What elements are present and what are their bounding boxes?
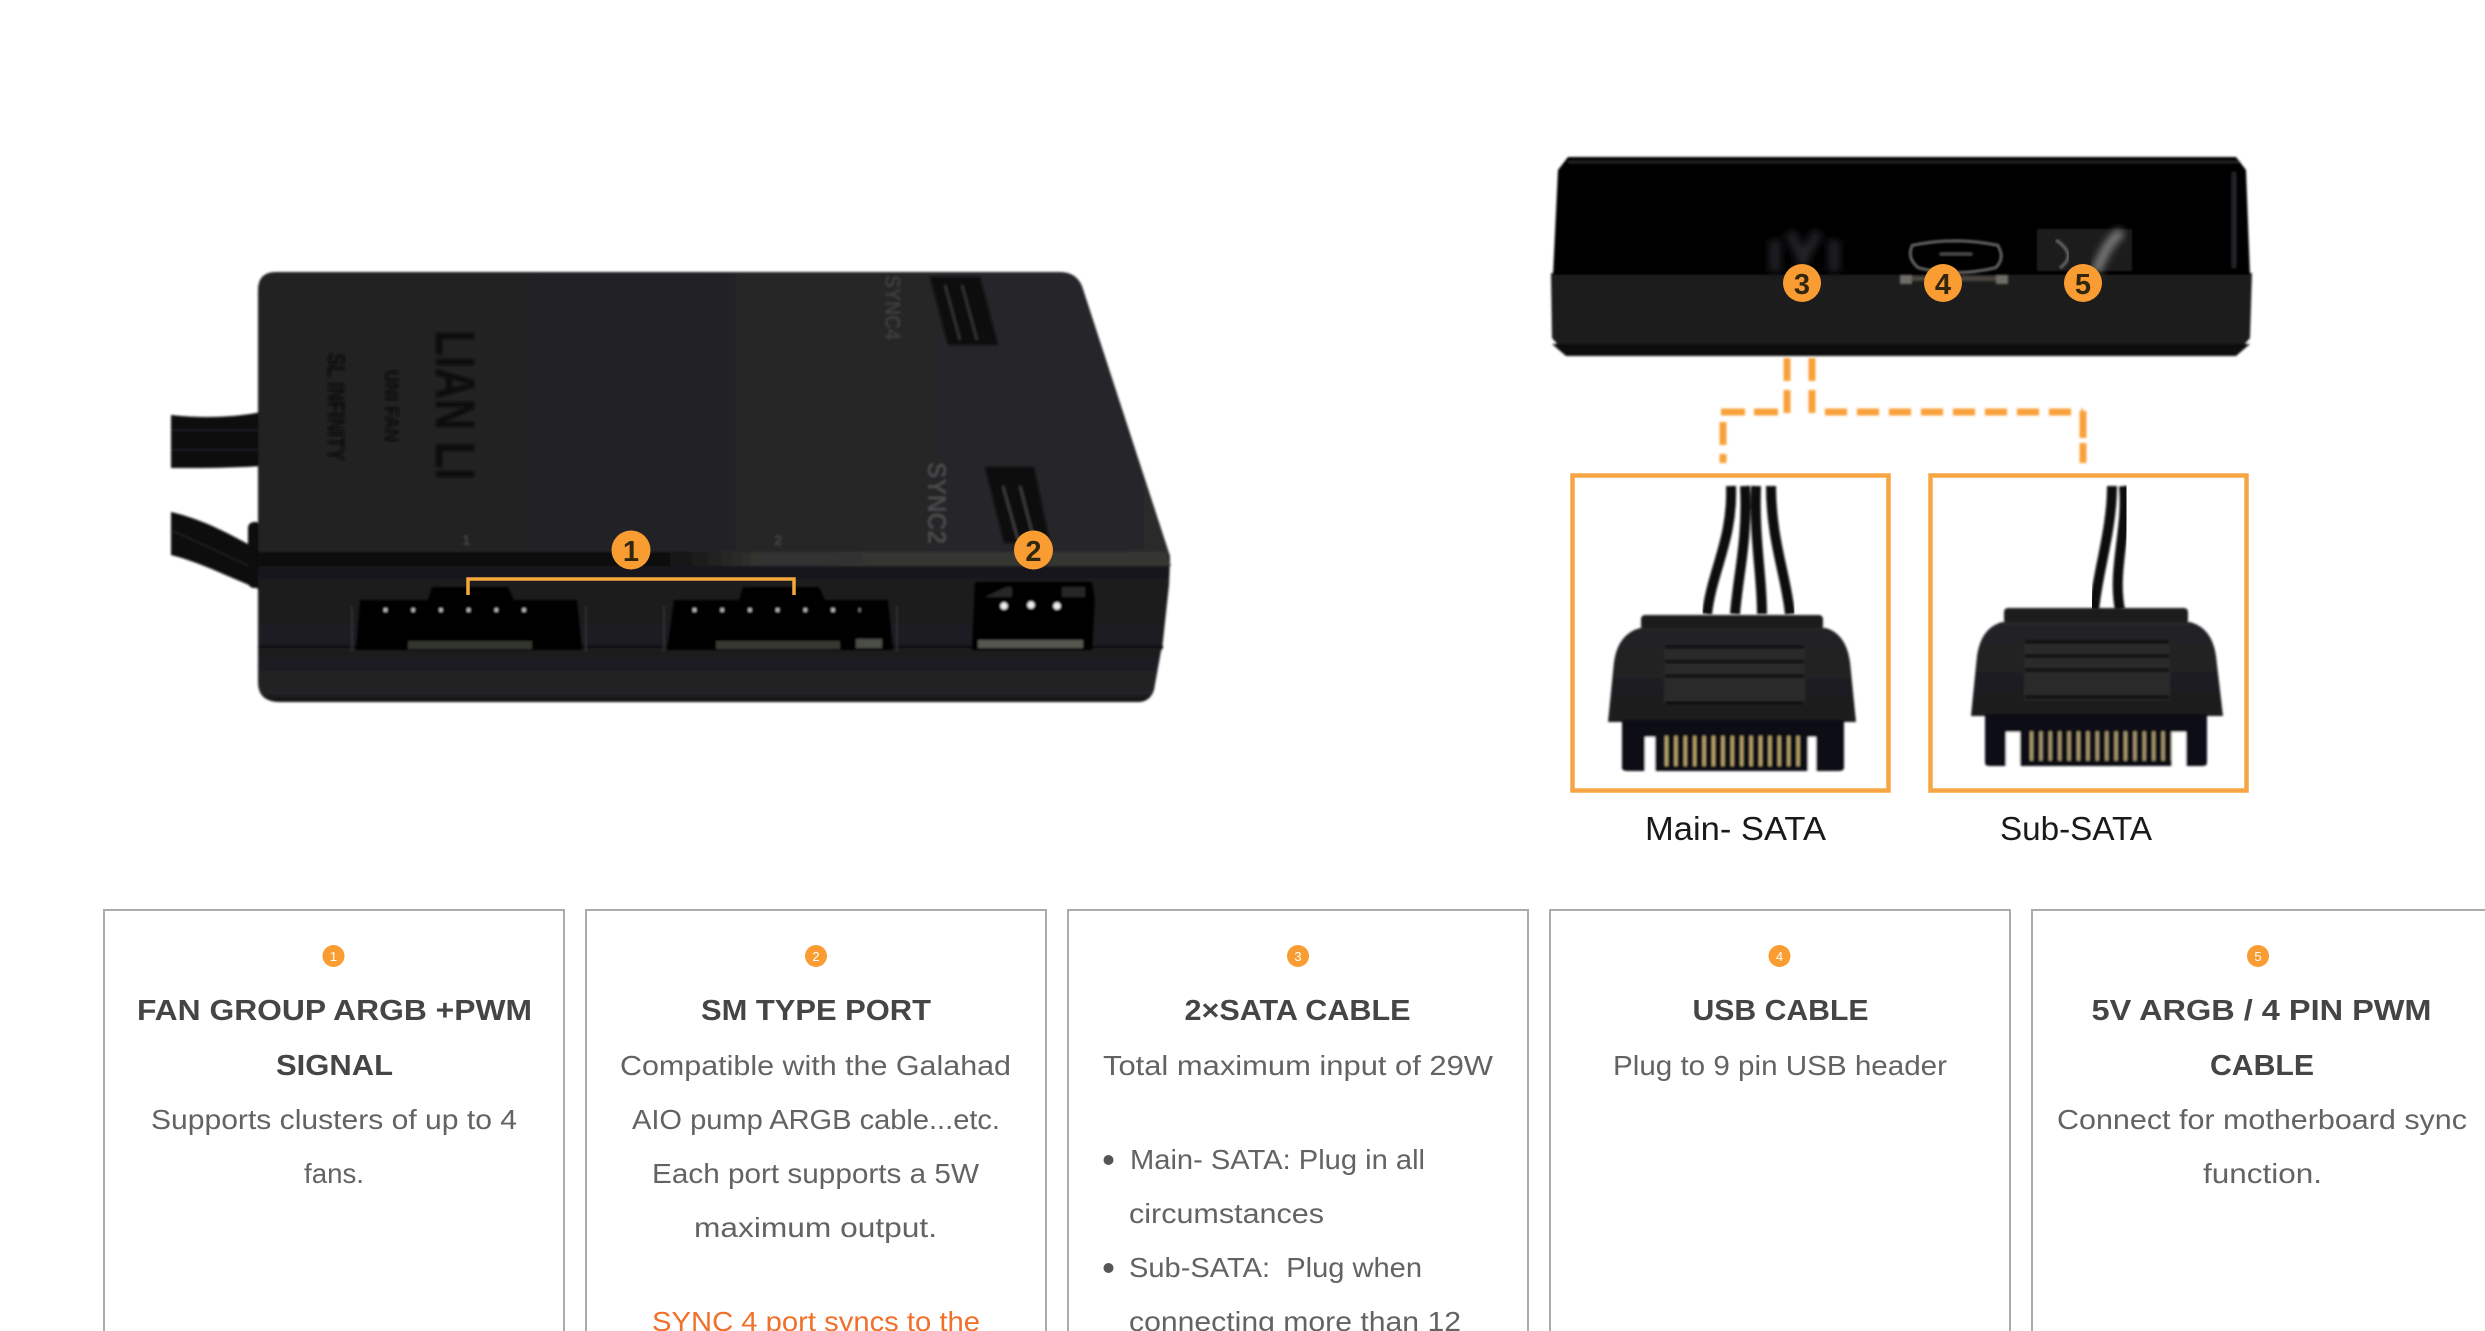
product photo: hub rear view: [1551, 157, 2252, 847]
heading: FAN GROUP ARGB +PWM: [137, 995, 532, 1027]
number marker 1: 1: [330, 949, 337, 964]
sub SATA cables: [2094, 486, 2125, 610]
panel: SATA cable: [1068, 910, 1528, 1331]
description: [151, 1104, 517, 1189]
embossed hub markings: SL INFINITY: [322, 353, 349, 461]
description: fans.: [304, 1158, 364, 1189]
heading: CABLE: [2210, 1050, 2314, 1082]
number marker 2: 2: [812, 949, 820, 964]
heading: SM TYPE PORT: [701, 995, 932, 1027]
panel: SM type port: [586, 910, 1046, 1331]
SATA cable exit: [1775, 232, 1834, 272]
SM port: [972, 582, 1095, 650]
bracket joining fan ports: [468, 579, 794, 595]
main SATA cables: [1707, 486, 1790, 614]
bullet list: [1104, 1144, 1461, 1331]
bullet list: Main- SATA: Plug in all: [1130, 1144, 1425, 1175]
dashed connector lines: [1721, 358, 2083, 463]
embossed hub markings: 2: [774, 532, 782, 549]
badge 4: [1924, 264, 1962, 302]
heading: USB CABLE: [1692, 995, 1868, 1027]
main SATA plug: [1608, 615, 1856, 771]
fan port 1: [352, 587, 586, 652]
description: function.: [2203, 1158, 2322, 1189]
description: AIO pump ARGB cable...etc.: [632, 1104, 1000, 1135]
heading: 5V ARGB / 4 PIN PWM: [2092, 995, 2432, 1027]
label: Main SATA: Main- SATA: [1645, 810, 1826, 847]
embossed hub markings: SYNC2: [922, 462, 952, 544]
badge 5: 5: [2075, 269, 2091, 301]
badge 3: 3: [1794, 269, 1810, 301]
badge 4: 4: [1935, 269, 1951, 301]
SYNC slots on top face: [930, 277, 1050, 543]
fan port 2: [664, 587, 897, 652]
embossed hub markings: [322, 275, 952, 549]
badge 3: [1783, 264, 1821, 302]
micro USB port: [1900, 240, 2008, 284]
description: [620, 1050, 1011, 1243]
badge 2: [1014, 530, 1053, 570]
number marker 3: [1287, 945, 1309, 967]
rear housing: [1551, 157, 2252, 356]
bullet list: Sub-SATA: Plug when: [1129, 1252, 1422, 1283]
ARGB PWM cable port: [2037, 229, 2132, 272]
description: Each port supports a 5W: [652, 1158, 980, 1189]
description: [2057, 1104, 2467, 1189]
product photo: hub top and front view: [171, 272, 1171, 702]
panel: sub SATA connector: [1930, 476, 2246, 790]
embossed hub markings: LIAN LI: [424, 330, 487, 480]
embossed hub markings: SYNC4: [880, 275, 905, 341]
badge 5: [2064, 264, 2102, 302]
heading: 2×SATA CABLE: [1184, 995, 1410, 1027]
label: Sub SATA: Sub-SATA: [2000, 810, 2152, 847]
badge 1: 1: [623, 536, 639, 568]
panel: main SATA connector: [1572, 476, 1888, 790]
embossed hub markings: 1: [462, 532, 470, 549]
number marker 3: 3: [1294, 949, 1302, 964]
bullet list: circumstances: [1129, 1198, 1324, 1229]
panel: USB cable: [1550, 910, 2010, 1331]
number marker 2: [805, 945, 827, 967]
embossed hub markings: UNI FAN: [380, 370, 401, 442]
number marker 4: [1768, 945, 1790, 967]
number marker 1: [322, 945, 344, 967]
badge 1: [612, 530, 650, 570]
description: maximum output.: [694, 1212, 937, 1243]
number marker 5: 5: [2254, 949, 2262, 964]
heading: [137, 995, 532, 1082]
badge 2: 2: [1025, 536, 1042, 568]
description: Plug to 9 pin USB header: [1613, 1050, 1947, 1081]
heading: SIGNAL: [276, 1050, 393, 1082]
description: Total maximum input of 29W: [1103, 1050, 1494, 1081]
description: Supports clusters of up to 4: [151, 1104, 517, 1135]
cables on left side of hub: [171, 412, 262, 590]
heading: [2092, 995, 2432, 1082]
panel: fan group port: [104, 910, 564, 1331]
hub body: [258, 272, 1171, 702]
number marker 5: [2247, 945, 2269, 967]
description: Compatible with the Galahad: [620, 1050, 1011, 1081]
sub SATA plug: [1971, 608, 2223, 766]
number marker 4: 4: [1776, 949, 1783, 964]
panel: ARGB PWM cable: [2032, 910, 2485, 1331]
description: Connect for motherboard sync: [2057, 1104, 2467, 1135]
